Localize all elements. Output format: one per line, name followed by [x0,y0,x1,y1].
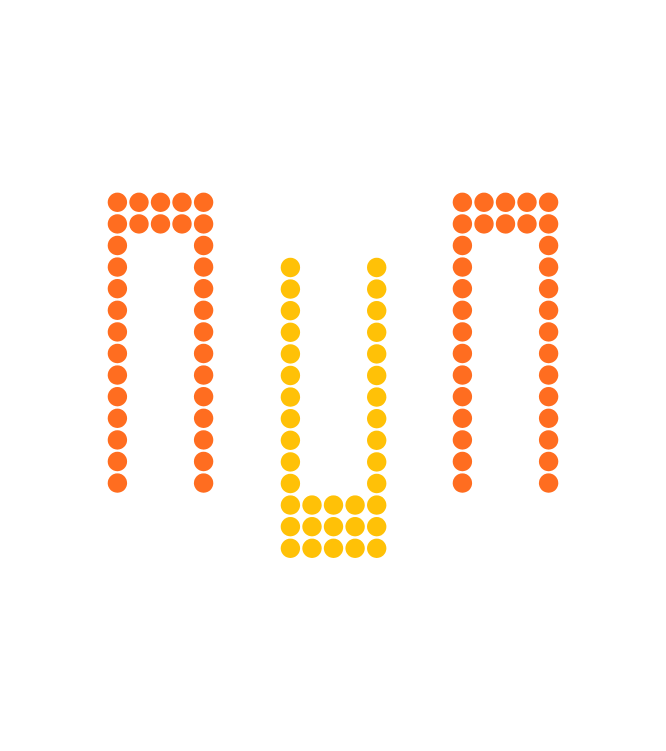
middle yellow U of dots [281,258,386,558]
left orange arch of dots [108,193,213,493]
right orange arch of dots [453,193,558,493]
